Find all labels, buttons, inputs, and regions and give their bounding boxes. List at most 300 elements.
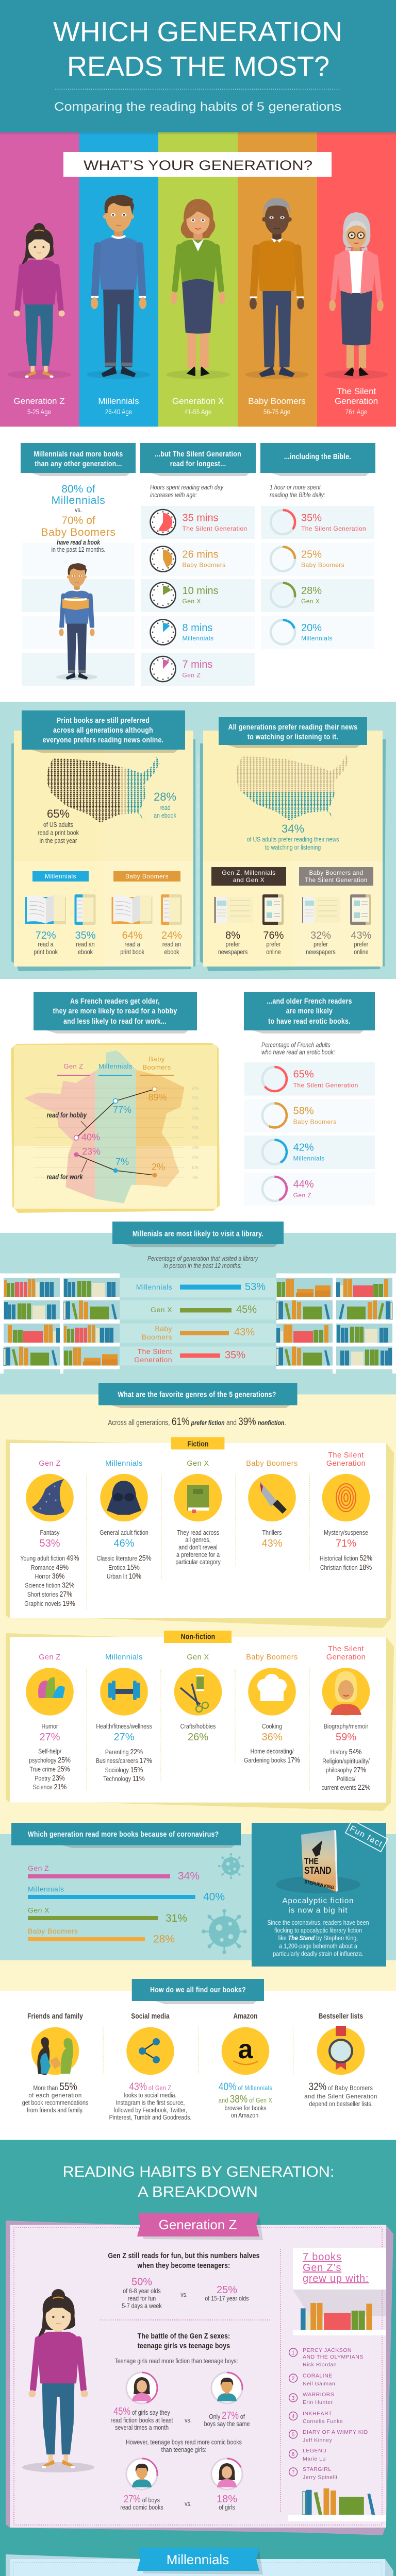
heading: french hobby: As French readers get older, (70, 997, 160, 1005)
book list: Neil Gaiman (303, 2381, 335, 2387)
clock row: Gen X: 10 mins (183, 585, 219, 597)
book list: Cornelia Funke (303, 2418, 343, 2425)
column labels (57, 1055, 174, 1076)
stats: younger news: 76% (263, 930, 284, 941)
bar: millennials: Millennials (28, 1885, 64, 1893)
column: gen z fantasy: Fantasy (40, 1529, 59, 1536)
bars: library visits: Gen X (151, 1306, 172, 1314)
column: boomers cooking (244, 1653, 300, 1764)
book: The Stand (301, 1830, 338, 1892)
ring: silent (262, 1067, 358, 1091)
heading: french hobby: and less likely to read for work... (63, 1017, 167, 1025)
panel: generation z (6, 2213, 393, 2535)
tag: boomers (113, 871, 180, 882)
ring: millennials: 42% (293, 1142, 314, 1153)
reads for fun: of 6-8 year olds (123, 2287, 161, 2295)
tag: fiction: Fiction (187, 1439, 209, 1448)
paper: news (203, 717, 383, 967)
ring: gen z: Gen Z (293, 1192, 311, 1199)
icon: amazon logo: a (238, 2035, 254, 2064)
ring: silent: The Silent Generation (293, 1082, 358, 1089)
battle of sexes: vs. (185, 2500, 192, 2507)
column: amazon: on Amazon. (231, 2111, 260, 2119)
non-fiction panel (6, 1631, 394, 1811)
icon: wizard hat (32, 1479, 64, 1515)
person: Millennial (87, 195, 151, 416)
book list: PERCY JACKSON (303, 2347, 352, 2353)
heading: millennials: than any other generation... (35, 460, 122, 468)
column: millennials health: Millennials (105, 1653, 143, 1662)
bar: boomers: 28% (153, 1934, 175, 1945)
bars: library visits: Baby (155, 1325, 172, 1333)
breakdown title: READING HABITS BY GENERATION: (63, 2164, 334, 2180)
axis labels: 80% (192, 1095, 199, 1100)
clock row: Millennials: Millennials (183, 635, 213, 642)
icon: scissors and thread (180, 1675, 208, 1712)
US map: news preference (236, 755, 353, 823)
heading: print books: everyone prefers reading news online. (43, 736, 163, 744)
heading: find books (132, 1979, 264, 2004)
stats: older news: 32% (310, 930, 331, 941)
hours text (150, 483, 224, 499)
column: millennials adult fiction: General adult fiction (100, 1529, 148, 1536)
tag: non-fiction: Non-fiction (181, 1633, 215, 1641)
column: gen z fantasy: Science fiction 32% (25, 1581, 75, 1589)
book list: Marie Lu (303, 2456, 326, 2462)
reads for fun: 5-7 days a week (122, 2302, 162, 2310)
book: The Stand: STAND (304, 1865, 331, 1876)
bible text: 1 hour or more spent (270, 483, 321, 491)
stat: 34 percent: 34% (282, 822, 304, 835)
bars: library visits: 43% (234, 1327, 255, 1338)
column: silent biography: current events 22% (321, 1783, 371, 1791)
heading: bible: ...including the Bible. (284, 452, 351, 461)
tag: older: Baby Boomers and (309, 870, 364, 876)
icon: fingerprint (336, 1484, 356, 1512)
bookshelf: right (276, 1274, 396, 1374)
stats: younger news: 8% (225, 930, 240, 941)
ring: Boomers bible: 25% (301, 549, 322, 561)
stats: boomer books: 64% (122, 930, 143, 941)
line: read for work: read for work (47, 1173, 84, 1181)
heading: print books (22, 710, 185, 753)
stat: 65 percent print: in the past year (40, 837, 77, 844)
column: amazon (219, 2012, 272, 2119)
bars: library visits: 53% (245, 1281, 266, 1293)
heading: french erotic: to have read erotic books. (268, 1017, 351, 1025)
column: social media: Social media (131, 2012, 170, 2020)
column: gen x crafts: 26% (188, 1732, 208, 1743)
bar: gen x: Gen X (28, 1906, 50, 1914)
tag: younger (211, 867, 286, 886)
stats: older news: online (354, 948, 369, 956)
column: silent biography: Generation (326, 1653, 366, 1662)
clock row: Gen Z: 7 mins (183, 659, 212, 670)
clock row: Gen Z: Gen Z (183, 672, 201, 679)
bars: library visits: Boomers (142, 1333, 172, 1341)
column: bestseller lists: Bestseller lists (319, 2012, 363, 2020)
heading: french erotic: ...and older French readers (267, 997, 352, 1005)
line: read for work (47, 1146, 165, 1181)
panel: erotic book rings: Percentage of French adults (261, 1041, 331, 1049)
ring: girls fiction (126, 2372, 157, 2403)
axis labels (192, 1086, 199, 1180)
person: Silent: 76+ Age (345, 408, 367, 416)
sidebar: 7 books: Gen Z’s (303, 2262, 341, 2274)
column: gen x all genres (174, 1460, 222, 1566)
stat: 28 percent ebook (154, 790, 176, 819)
heading: coronavirus (11, 1823, 241, 1848)
battle of sexes: vs. (185, 2416, 192, 2424)
stat: 65 percent print (38, 807, 79, 844)
column: gen z fantasy: Short stories 27% (27, 1590, 72, 1598)
column: millennials health (96, 1653, 152, 1783)
stats: older news: newspapers (306, 948, 336, 956)
column: gen z fantasy: 53% (39, 1538, 60, 1549)
column: silent mystery: Historical fiction 52% (320, 1554, 372, 1562)
hero header (0, 0, 396, 132)
battle of sexes: teenage girls vs teenage boys (138, 2342, 230, 2350)
line: read for work: 7% (116, 1157, 129, 1167)
column: social media: Instagram is the first source, (116, 2098, 185, 2107)
icon: amazon logo (234, 2035, 258, 2064)
ring: boys fiction (211, 2372, 242, 2403)
tag: older (299, 867, 373, 886)
icons: older news (302, 894, 371, 925)
column: silent biography: Religion/spirituality/ (322, 1757, 370, 1765)
stats: millennial books: ebook (78, 948, 93, 956)
person: Silent: The Silent (337, 386, 376, 396)
library intro: Percentage of generation that visited a library (147, 1255, 258, 1262)
column: gen z fantasy: Gen Z (39, 1460, 61, 1468)
column: gen x all genres: a preference for a (176, 1551, 220, 1558)
reads for fun: when they become teenagers: (137, 2261, 230, 2269)
battle of sexes: However, teenage boys read more comic books (126, 2438, 242, 2446)
breakdown title: A BREAKDOWN (138, 2184, 258, 2200)
column: social media: Pinterest, Tumblr and Goodreads. (109, 2113, 191, 2121)
stats: boomer books: read a (125, 940, 140, 948)
tag: millennials (32, 871, 89, 882)
subtitle: Comparing the reading habits of 5 generations (54, 100, 341, 114)
column: boomers thrillers: Thrillers (262, 1529, 282, 1536)
bars: library visits: Millennials (136, 1283, 172, 1291)
stat: 65 percent print: read a print book (38, 828, 79, 837)
book stat text: vs. (75, 506, 82, 514)
heading: silent: read for longest... (170, 460, 226, 468)
stats: millennial books (34, 930, 96, 956)
column: gen z humor: psychology 25% (29, 1756, 71, 1764)
column labels: Baby (148, 1055, 165, 1063)
column: millennials health: Parenting 22% (105, 1748, 143, 1756)
column: amazon: 40% of Millennials (219, 2081, 272, 2093)
column: silent biography: 59% (336, 1732, 356, 1743)
person: Silent (324, 212, 388, 416)
battle of sexes: several times a month (115, 2424, 169, 2431)
icon: share (139, 2038, 160, 2063)
icon: chef hat (257, 1674, 287, 1701)
line: read for hobby: read for hobby (47, 1111, 87, 1119)
clock row: Silent: The Silent Generation (183, 525, 248, 532)
column: silent biography (321, 1645, 371, 1791)
clock row: Boomers (151, 546, 226, 572)
book list: 3 (292, 2395, 295, 2401)
heading: news (219, 717, 367, 748)
clock row: Gen X (151, 582, 219, 608)
panel: france chart (11, 1043, 220, 1221)
column: friends and family: from friends and family. (27, 2106, 84, 2114)
france map (24, 1050, 185, 1204)
clock row: Silent: 35 mins (183, 512, 219, 523)
axis labels: 60% (192, 1115, 199, 1121)
sidebar: 7 books (288, 2248, 386, 2521)
line: read for hobby (47, 1087, 167, 1143)
bar: gen z (28, 1864, 200, 1882)
column: gen z humor: Poetry 23% (35, 1774, 65, 1782)
fun fact text: like The Stand by Stephen King, (278, 1934, 358, 1942)
column: gen x all genres: and don't reveal (178, 1543, 218, 1551)
battle of sexes: boys say the same (204, 2420, 250, 2428)
person: Gen X (166, 199, 230, 416)
icon: green book (187, 1485, 209, 1513)
person: Gen Z: Generation Z (13, 396, 65, 406)
column labels: Millennials (98, 1062, 133, 1070)
stats: older news: 43% (351, 930, 372, 941)
bar: gen x: 31% (166, 1912, 187, 1924)
bar: millennials: 40% (203, 1891, 225, 1903)
book stat text: 80% of (61, 483, 95, 495)
book list: Jerry Spinelli (303, 2474, 337, 2480)
ring: Silent bible: 35% (301, 512, 322, 523)
stat: 28 percent ebook: 28% (154, 790, 176, 803)
stats: younger news (218, 930, 284, 956)
battle of sexes: read fiction books at least (111, 2416, 173, 2424)
column: boomers cooking: Baby Boomers (246, 1653, 298, 1662)
stat: 34 percent: of US adults prefer reading their news (247, 836, 339, 843)
column labels: Boomers (142, 1063, 171, 1071)
heading: silent (140, 443, 256, 476)
column: millennials adult fiction: Erotica 15% (108, 1563, 140, 1571)
stats: older news: prefer (314, 940, 328, 948)
clock row: Boomers: Baby Boomers (183, 562, 226, 569)
column: gen x all genres: They read across (177, 1529, 219, 1536)
shelf (293, 2303, 386, 2335)
column: boomers thrillers: 43% (261, 1538, 283, 1549)
title (53, 16, 342, 82)
generation stripes (0, 132, 396, 427)
person: Baby Boomer (245, 198, 309, 416)
fun fact text: a 1,200-page behemoth about a (279, 1942, 357, 1950)
stat: 34 percent (247, 822, 339, 851)
axis labels: 70% (192, 1106, 199, 1111)
book list: Erin Hunter (303, 2399, 333, 2405)
ring: Boomers bible (271, 547, 344, 571)
stats: millennial books: 35% (75, 930, 96, 941)
column: bestseller lists: depend on bestseller lists. (309, 2100, 373, 2108)
battle of sexes (111, 2332, 250, 2511)
fun fact text: is now a big hit (288, 1906, 348, 1914)
battle of sexes: Only 27% of (209, 2409, 245, 2421)
column: boomers cooking: Cooking (262, 1722, 282, 1730)
book list: STARGIRL (303, 2466, 332, 2472)
line: read for hobby: 77% (113, 1105, 131, 1115)
column: gen z humor: Humor (42, 1722, 58, 1730)
book list: WARRIORS (303, 2392, 334, 2398)
column: social media: followed by Facebook, Twitter, (113, 2106, 187, 2114)
heading: french hobby: they are more likely to read for a hobby (53, 1007, 177, 1015)
battle of sexes: read comic books (120, 2503, 163, 2511)
stats: boomer books: print book (120, 948, 144, 956)
stat: 65 percent print: of US adults (43, 821, 73, 828)
axis labels: 90% (192, 1086, 199, 1091)
column: gen z fantasy: Horror 36% (35, 1572, 64, 1580)
book list: Jeff Kinney (303, 2437, 333, 2443)
column: friends and family: get book recommendations (22, 2098, 88, 2107)
column: millennials adult fiction: Urban lit 10% (107, 1572, 141, 1580)
book list: INKHEART (303, 2411, 332, 2417)
ring: silent: 65% (293, 1069, 314, 1080)
column: silent biography: Biography/memoir (324, 1722, 368, 1730)
column: millennials health: Sociology 15% (105, 1766, 143, 1774)
stamp: fun fact (345, 1820, 388, 1852)
hours text: Hours spent reading each day (150, 483, 224, 491)
hours text: increases with age: (150, 491, 197, 499)
column: silent mystery: Generation (326, 1460, 366, 1468)
stats: millennial books: 72% (36, 930, 56, 941)
column: silent biography: philosophy 27% (326, 1766, 366, 1774)
bars: library visits: 45% (236, 1304, 257, 1315)
column: silent mystery: Mystery/suspense (324, 1529, 368, 1536)
sidebar: 7 books: 7 books (303, 2251, 342, 2263)
column: gen x crafts: Gen X (187, 1653, 209, 1662)
column: gen z humor: Science 21% (33, 1783, 67, 1791)
icon: two people (37, 2037, 73, 2075)
ring: boomers: Baby Boomers (293, 1118, 337, 1125)
ribbon: millennials: Millennials (167, 2552, 229, 2567)
icon: large virus (202, 1909, 247, 1954)
person: Gen Z (7, 223, 71, 416)
axis labels: 50% (192, 1125, 199, 1130)
what's your generation banner: WHAT’S YOUR GENERATION? (84, 158, 312, 173)
panel: finding books (22, 1979, 377, 2121)
book stat text: have read a book (57, 539, 100, 546)
column: silent mystery: The Silent (328, 1451, 364, 1460)
clock row: Gen Z (151, 656, 212, 682)
reads for fun (108, 2251, 260, 2310)
US map: print vs ebook (47, 757, 163, 824)
column: millennials health: Health/fitness/wellness (96, 1722, 152, 1730)
heading: bible (260, 443, 375, 476)
panel: library band (0, 1222, 396, 1395)
heading: library (112, 1222, 284, 1247)
stats: boomer books: ebook (164, 948, 179, 956)
column: friends and family: More than 55% (33, 2081, 77, 2093)
tag: older: The Silent Generation (305, 877, 368, 884)
column: silent mystery: 71% (336, 1538, 356, 1549)
stat: 65 percent print: 65% (47, 807, 70, 820)
fun fact text: particularly deadly strain of influenza. (273, 1950, 364, 1958)
column: millennials health: Business/careers 17% (96, 1756, 152, 1765)
stats: older news (306, 930, 372, 956)
ring: girls comics (211, 2459, 242, 2489)
axis labels: 10% (192, 1165, 199, 1170)
sidebar: 7 books: grew up with: (303, 2273, 369, 2284)
icons: younger news (214, 894, 284, 925)
column: gen z fantasy: Young adult fiction 49% (20, 1554, 79, 1562)
stat: 28 percent ebook: read (159, 804, 171, 811)
book stat text: Millennials (52, 495, 105, 506)
heading: french hobby (34, 992, 197, 1033)
battle of sexes: 45% of girls say they (113, 2405, 170, 2417)
column: boomers cooking: 36% (261, 1732, 283, 1743)
person: Millennial: 26-40 Age (105, 408, 132, 416)
ring: Silent bible (271, 510, 366, 534)
line: read for work: 23% (82, 1146, 101, 1157)
panel: genres (0, 1383, 396, 1834)
column: gen z humor: True crime 25% (29, 1765, 70, 1773)
title: WHICH GENERATION (53, 16, 342, 47)
panel: reading amounts (21, 443, 375, 686)
heading: news: to watching or listening to it. (248, 733, 338, 741)
panel: breakdown background (0, 2140, 396, 2576)
line: read for hobby: 40% (81, 1132, 100, 1143)
stats: older news: prefer (354, 940, 368, 948)
panel: millennials (6, 2548, 393, 2576)
book: The Stand: THE (304, 1857, 319, 1866)
clock row: Millennials: 8 mins (183, 622, 212, 634)
bars: library visits: Generation (134, 1355, 172, 1364)
stats: younger news: prefer (266, 940, 280, 948)
bible text (270, 483, 325, 499)
library intro (147, 1255, 258, 1269)
axis labels: 30% (192, 1145, 199, 1150)
figure: gen z (22, 2289, 94, 2472)
heading: french erotic: are more likely (286, 1007, 333, 1015)
panel: erotic book rings: who have read an erotic book: (261, 1048, 335, 1056)
bar: gen z: Gen Z (28, 1864, 49, 1872)
column: friends and family: Friends and family (27, 2012, 83, 2020)
bar: gen z: 34% (178, 1870, 200, 1882)
column: gen z fantasy: Romance 49% (31, 1563, 69, 1571)
title: READS THE MOST? (67, 51, 329, 82)
column labels: Gen Z (63, 1062, 84, 1070)
heading: print books: across all generations although (53, 726, 153, 734)
column: silent mystery (320, 1451, 372, 1571)
stats: millennial books: read a (38, 940, 54, 948)
reads for fun: vs. (180, 2291, 188, 2298)
heading: french erotic (244, 992, 375, 1033)
column: silent biography: The Silent (328, 1645, 364, 1653)
ring: boomers (262, 1104, 337, 1127)
ring: gen z (262, 1177, 314, 1201)
battle of sexes: Teenage girls read more fiction than teenage boys: (114, 2357, 238, 2365)
stats: millennial books: read an (76, 940, 95, 948)
battle of sexes: The battle of the Gen Z sexes: (138, 2332, 230, 2340)
fun fact text (267, 1896, 369, 1958)
ribbon: millennials (137, 2548, 263, 2574)
icon: dumbbell (108, 1681, 140, 1700)
column: social media: 43% of Gen Z (129, 2081, 171, 2093)
ribbon: generation z: Generation Z (159, 2217, 237, 2232)
person: Millennial: Millennials (98, 396, 139, 406)
column: boomers thrillers: Baby Boomers (246, 1460, 298, 1468)
ring: boys comics (126, 2459, 157, 2489)
icons: millennial books (25, 894, 96, 925)
fiction panel (6, 1437, 394, 1628)
ring: Millennials bible: 20% (301, 622, 322, 634)
ring: Silent bible: The Silent Generation (301, 525, 366, 532)
column: gen z fantasy (20, 1460, 79, 1607)
book list: CORALINE (303, 2373, 333, 2379)
